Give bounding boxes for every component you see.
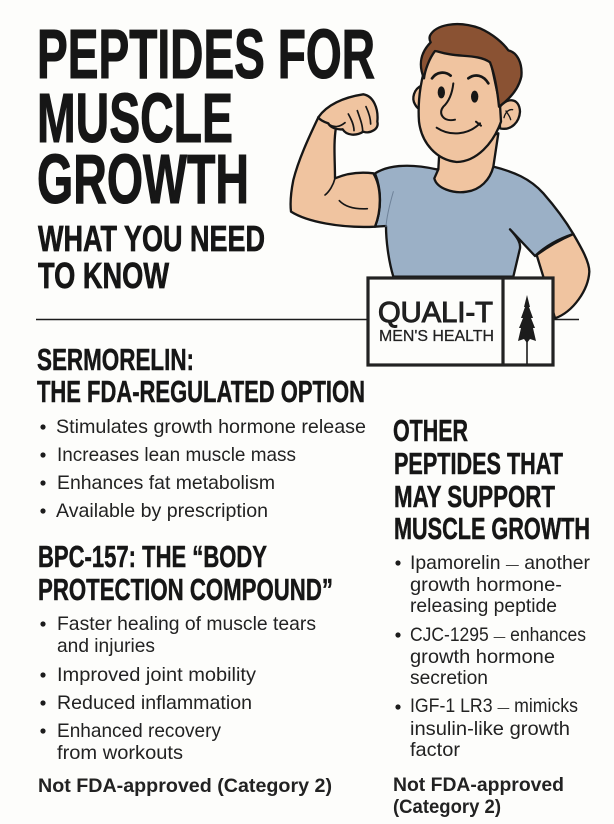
left ear [413, 86, 421, 109]
eyes [438, 86, 445, 98]
list: sermorelin benefits: Enhances fat metabolism [57, 472, 275, 494]
logo: QUALI-T [378, 297, 493, 329]
list: other peptides: IGF-1 LR3 — mimicks [410, 695, 578, 717]
list: other peptides: insulin-like growth [410, 718, 570, 740]
note: BPC-157 status: Not FDA-approved (Category 2) [38, 776, 332, 797]
heading: other peptides [393, 413, 590, 546]
heading: other peptides: MAY SUPPORT [394, 479, 555, 514]
list: other peptides [395, 552, 590, 761]
panel: sermorelin [37, 342, 366, 522]
list: other peptides: factor [410, 739, 461, 761]
heading: other peptides: OTHER [393, 413, 468, 448]
right arm [537, 234, 589, 318]
shirt [375, 166, 573, 277]
list: sermorelin benefits: Available by prescription [56, 500, 268, 522]
list: other peptides: CJC-1295 — enhances [410, 624, 586, 646]
subtitle [38, 218, 265, 296]
subtitle: TO KNOW [38, 255, 169, 296]
list: sermorelin benefits: Stimulates growth hormone release [56, 416, 366, 438]
note: other peptides status: (Category 2) [393, 797, 501, 818]
panel: BPC-157 [38, 539, 333, 797]
list: BPC-157 benefits: from workouts [57, 742, 183, 764]
list: other peptides: secretion [410, 667, 488, 689]
panel: other peptides [393, 413, 590, 818]
right ear [499, 100, 520, 129]
neck [434, 133, 498, 192]
list: other peptides: releasing peptide [410, 595, 557, 617]
note: other peptides status [393, 775, 564, 818]
title: GROWTH [37, 140, 249, 218]
heading: BPC-157 [38, 539, 333, 607]
subtitle: WHAT YOU NEED [38, 218, 265, 259]
list: other peptides: growth hormone- [410, 574, 562, 596]
list: BPC-157 benefits [40, 613, 316, 764]
list: BPC-157 benefits: Enhanced recovery [57, 720, 221, 742]
list: sermorelin benefits [40, 416, 366, 522]
left arm [291, 117, 380, 227]
list: BPC-157 benefits: Faster healing of muscle tears [57, 613, 316, 635]
list: other peptides: Ipamorelin — another [410, 552, 590, 574]
hair [421, 24, 522, 107]
heading: sermorelin [37, 342, 365, 409]
face [419, 48, 501, 162]
heading: BPC-157: BPC-157: THE “BODY [38, 539, 267, 574]
list: other peptides: growth hormone [410, 646, 555, 668]
list: BPC-157 benefits: Improved joint mobility [57, 664, 256, 686]
logo [368, 278, 553, 365]
head [413, 24, 522, 162]
title: PEPTIDES FOR [37, 15, 375, 93]
list: BPC-157 benefits: Reduced inflammation [57, 692, 252, 714]
list: BPC-157 benefits: and injuries [57, 635, 155, 657]
title: MUSCLE [37, 79, 233, 157]
body and arms [291, 94, 589, 318]
mouth [437, 122, 481, 133]
note: other peptides status: Not FDA-approved [393, 775, 564, 796]
heading: BPC-157: PROTECTION COMPOUND” [38, 572, 333, 607]
nose [441, 83, 455, 120]
title [37, 15, 375, 218]
icon: pine tree [518, 295, 536, 364]
illustration: man flexing bicep [291, 24, 589, 318]
fist [318, 94, 378, 135]
heading: sermorelin: SERMORELIN: [37, 342, 194, 377]
logo: MEN'S HEALTH [379, 328, 494, 345]
list: sermorelin benefits: Increases lean muscle mass [57, 444, 296, 466]
heading: sermorelin: THE FDA-REGULATED OPTION [37, 374, 365, 409]
